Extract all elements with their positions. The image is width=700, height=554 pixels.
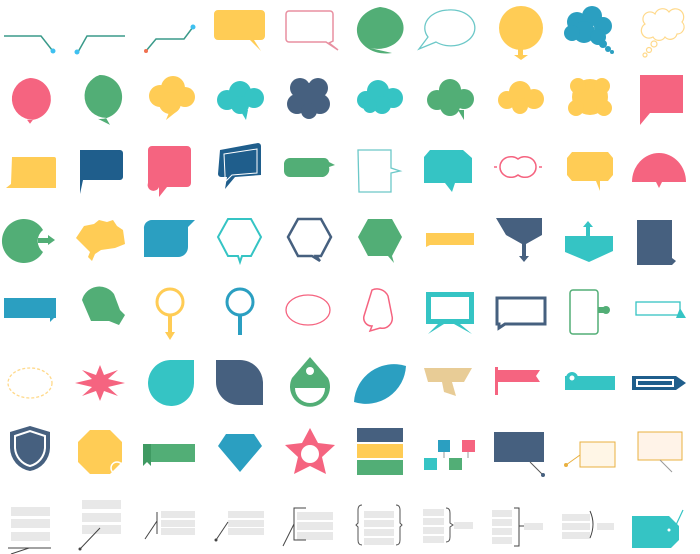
icon: teal screen bubble: [426, 292, 474, 334]
icon: teal cloud: [217, 81, 264, 120]
icon: yellow cloud: [149, 76, 195, 120]
icon: teal outline oval bubble: [419, 10, 475, 49]
icon: navy rect bubble: [80, 150, 123, 194]
icon: green oval bubble: [357, 7, 404, 54]
icon: teal leaf: [148, 360, 194, 406]
icon: list with bracket 5: [283, 508, 333, 546]
row 7: shield, octagon, star, diagrams: [10, 426, 682, 477]
icon: blue rect bubble: [4, 298, 56, 322]
icon: pink outline double circle: [494, 157, 542, 177]
icon: yellow banner: [426, 233, 474, 247]
icon: list with brace and tab 7: [423, 508, 473, 543]
icon: connector line 2: [74, 36, 125, 54]
icon: connector line 1: [4, 36, 56, 54]
icon: yellow outline rect with leader: [564, 442, 615, 467]
row 2: round bubbles and clouds: [12, 75, 683, 125]
icon: yellow octagon: [78, 430, 123, 474]
icon: green cloud: [427, 79, 474, 120]
icon: green outline rect with knob: [570, 290, 610, 334]
icon: dark blue cloud: [287, 78, 330, 119]
icon: list with leader 2: [78, 500, 121, 550]
icon: pink square folded: [640, 75, 683, 125]
row 6: bursts and leaves: [8, 357, 686, 407]
icon: pink flag: [495, 367, 540, 395]
icon: yellow ginkgo leaf: [76, 220, 125, 261]
icon: green circle bubble: [85, 75, 122, 125]
row 4: hexagons and shapes: [2, 218, 676, 265]
icon: tan ribbon: [424, 368, 472, 396]
icon: yellow octagon bubble: [567, 152, 613, 191]
icon: green circle with arrow: [2, 219, 55, 263]
icon: pink semicircle: [632, 153, 686, 188]
icon: yellow pin: [157, 289, 183, 340]
icon: list with bracket and tab 8: [492, 508, 543, 546]
icon: green pill bubble: [284, 158, 335, 177]
icon: list with paren and tab 9: [562, 511, 614, 539]
row 8: list callouts: [8, 500, 683, 554]
icon: yellow cloud 2: [498, 81, 544, 114]
icon: dark blue funnel arrow: [496, 218, 542, 262]
icon: blue leaf: [354, 364, 406, 404]
icon: teal clipped bubble: [424, 150, 472, 192]
icon: pink circle bubble: [12, 78, 51, 124]
icon: yellow outline starburst: [8, 368, 52, 398]
icon: blue diamond: [218, 434, 262, 472]
row 1: connectors and speech bubbles: [4, 6, 684, 60]
icon: pink outline ellipse: [286, 295, 330, 325]
icon: dark blue shield: [10, 426, 50, 471]
icon: list with bar 3: [145, 511, 195, 539]
icon: teal tag: [632, 510, 683, 548]
icon: blue leaf rect: [144, 220, 195, 257]
icon: outline rect with leader: [638, 432, 682, 472]
icon: green blob: [82, 287, 125, 325]
icon: connector line 3: [144, 24, 196, 53]
icon: list with leader 4: [214, 511, 264, 542]
icon: yellow blob: [568, 78, 612, 116]
icon: pink outline bubble: [286, 11, 338, 50]
icon: pink outline blob bubble: [364, 289, 392, 331]
icon: pink starburst: [75, 365, 125, 401]
row 3: rectangular bubbles: [6, 143, 686, 197]
row 5: pins and screens: [4, 287, 686, 340]
icon: blue thought cloud: [564, 6, 614, 54]
icon: dark blue rect with leader: [494, 432, 545, 477]
icon: teal outline bar: [636, 302, 686, 318]
icon: green hexagon: [358, 219, 402, 263]
icon: blue pin: [227, 289, 253, 335]
icon: stacked bars: [357, 428, 403, 475]
icon: list with braces 6: [356, 505, 402, 545]
icon: yellow round bubble with stem: [499, 6, 543, 60]
icon: dark blue leaf: [216, 360, 263, 405]
icon: pink star: [285, 428, 335, 474]
icon: green drop with white circle: [290, 357, 330, 407]
icon: teal outline bracket bubble: [358, 150, 400, 192]
icon: dark blue outline rect: [497, 298, 545, 328]
icon: navy tilted bubble: [218, 143, 261, 189]
icon: teal shape with up arrow: [565, 221, 613, 262]
icon: green banner: [143, 444, 195, 466]
icon: dark blue tall rect: [637, 220, 676, 265]
icon: navy pencil: [632, 376, 686, 390]
icon: teal cloud 2: [357, 80, 403, 114]
icon: yellow outline thought cloud: [641, 9, 684, 57]
icon: yellow rect bubble: [214, 10, 265, 51]
icon: teal bar with pin: [565, 372, 615, 390]
icon: pink rect bubble: [148, 146, 191, 197]
icon: list with underline 1: [8, 507, 51, 554]
icon: dark blue outline hexagon: [288, 219, 331, 261]
icon: teal outline hexagon: [218, 219, 261, 262]
icon: yellow square bubble: [6, 157, 56, 188]
icon: small squares diagram: [424, 440, 475, 470]
